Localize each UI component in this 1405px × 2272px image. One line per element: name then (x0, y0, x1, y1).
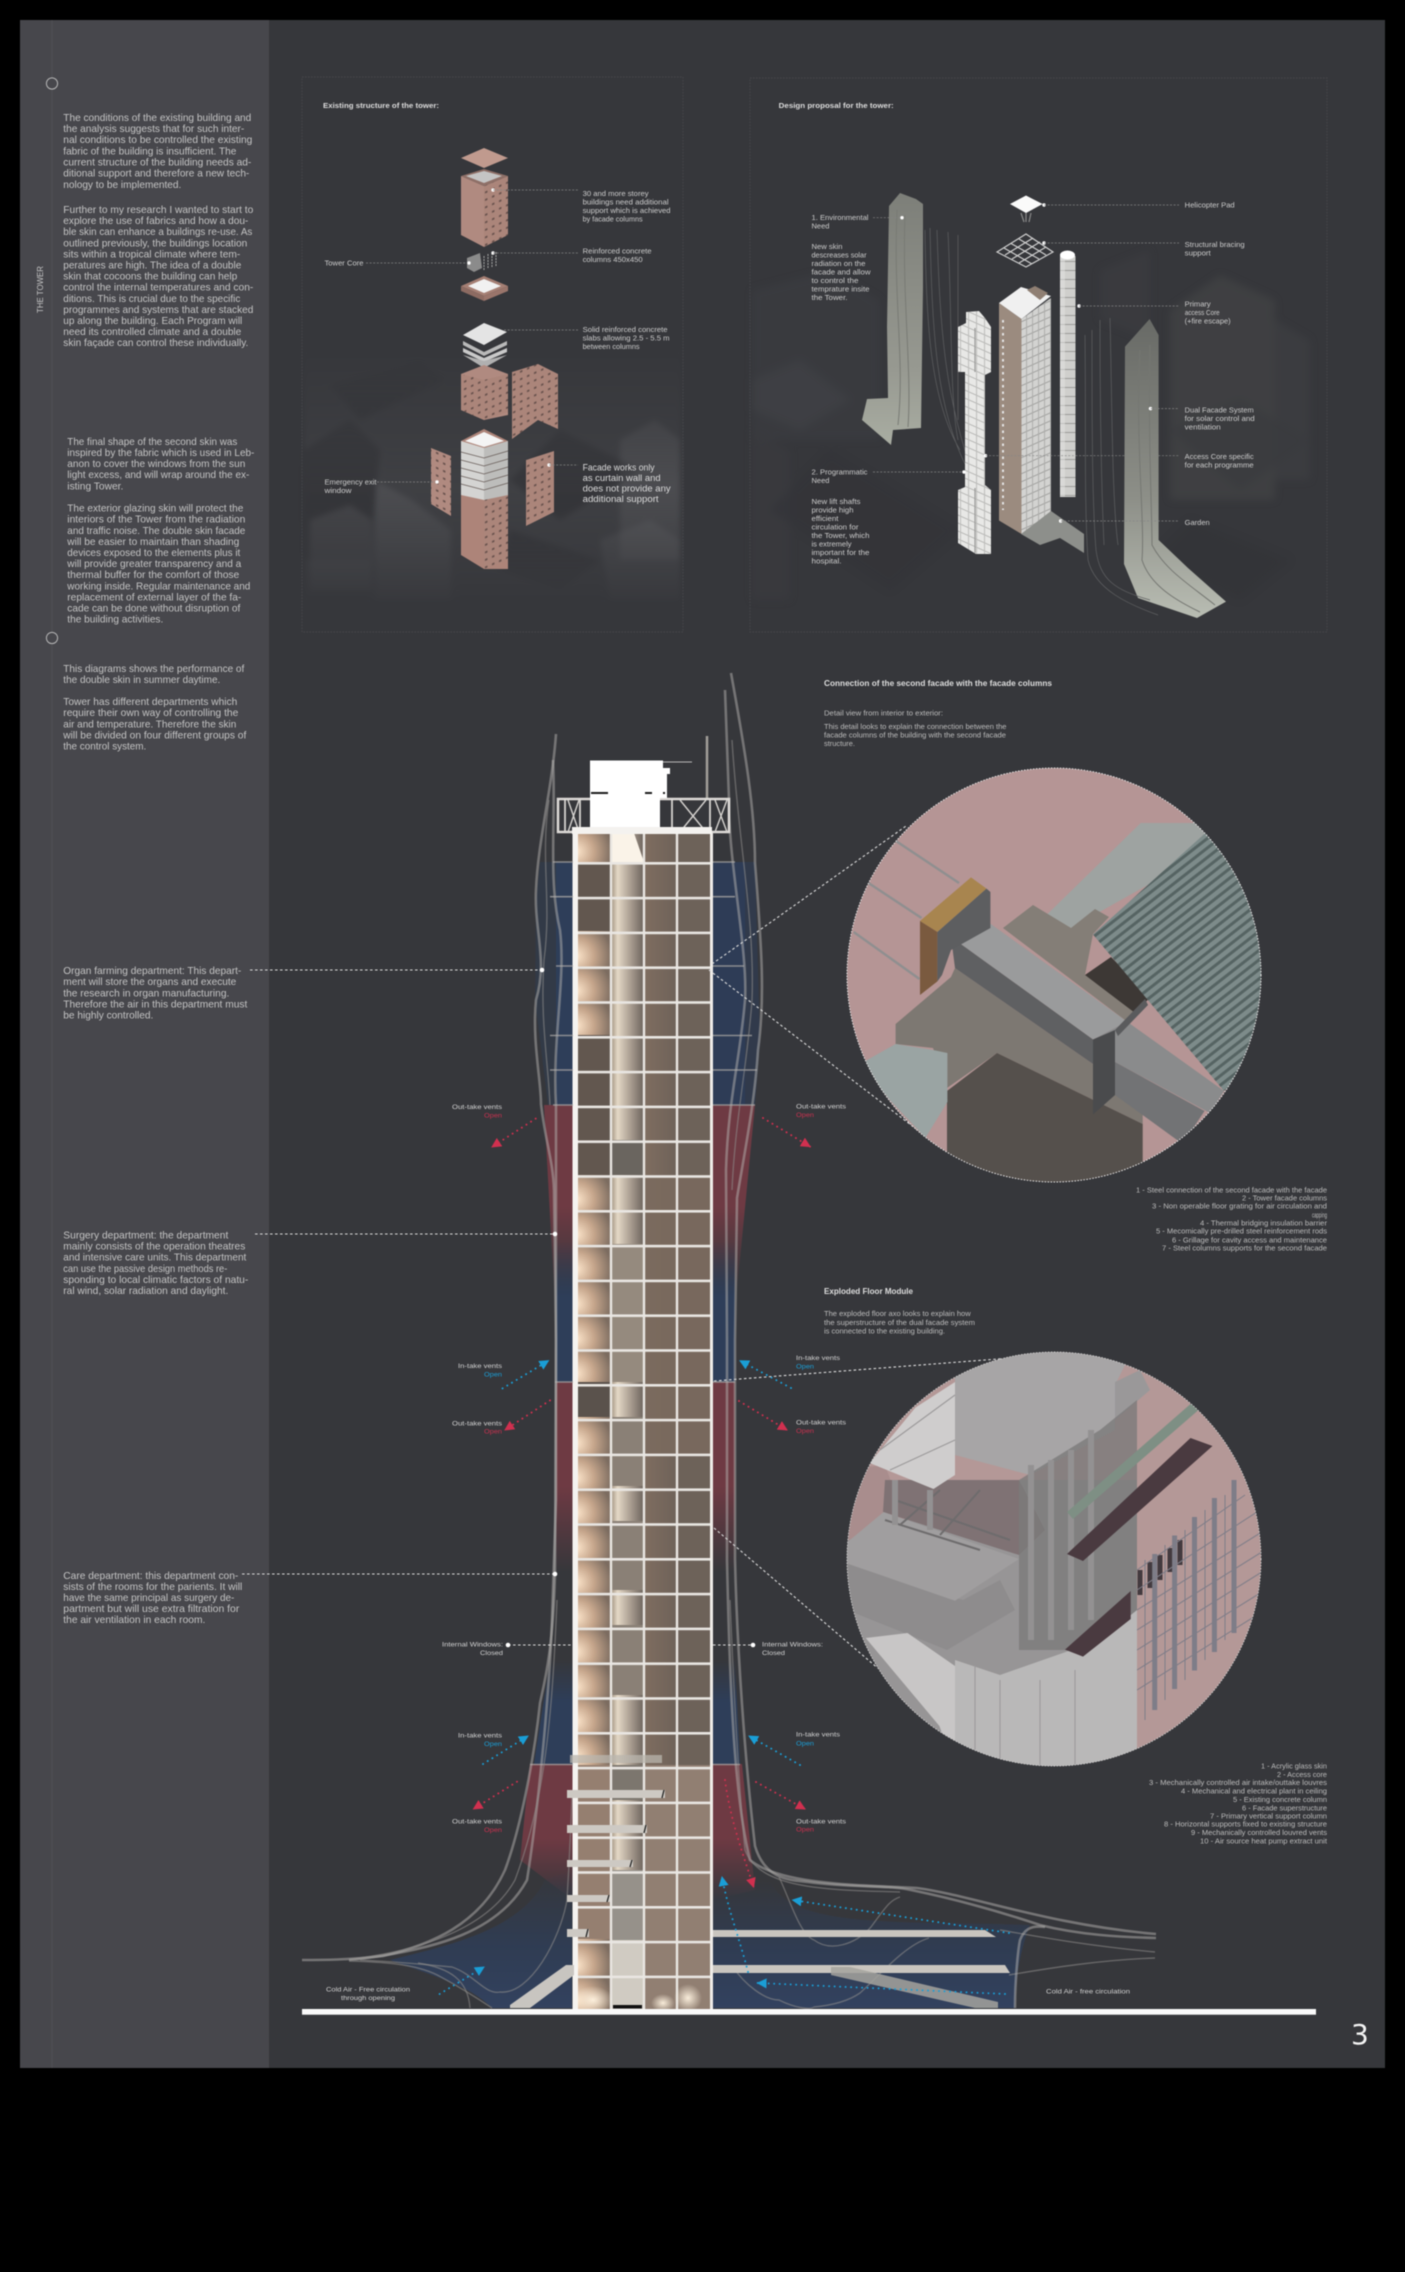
callout: columns (491, 246, 652, 264)
heading: connection detail: This detail looks to explain the connection between the (824, 722, 1006, 731)
legend: floor module: 6 - Facade superstructure (1242, 1803, 1327, 1812)
vent: out-take middle right (739, 1401, 846, 1435)
text block: surgery: sponding to local climatic factors of natu- (63, 1275, 248, 1286)
heading: connection detail (824, 679, 1053, 748)
cavity floor lines (530, 862, 757, 1764)
text block: care: have the same principal as surgery de- (63, 1593, 234, 1604)
heading: exploded floor module: Exploded Floor Module (824, 1287, 914, 1296)
text block: final shape: inspired by the fabric which is used in Leb- (67, 448, 254, 459)
garden (1021, 511, 1084, 553)
text block: research on fabrics: outlined previously, the buildings location (63, 238, 247, 249)
legend: connection detail: 7 - Steel columns supports for the second facade (1162, 1244, 1327, 1253)
concrete top (1003, 905, 1135, 1022)
text block: care: partment but will use extra filtration for (63, 1604, 240, 1615)
internal windows left (442, 1642, 571, 1657)
panel: design proposal (750, 78, 1327, 632)
vent: in-take middle left: In-take vents (458, 1363, 502, 1370)
text block: diagram intro: will be divided on four different groups of (62, 730, 246, 741)
text block: existing building conditions: fabric of the building is insufficient. The (63, 146, 237, 157)
steel beam (962, 924, 1124, 1040)
text block: diagram intro: air and temperature. Therefore the skin (63, 719, 236, 730)
callout: tower core (324, 258, 471, 268)
callout: access core: for each programme (1185, 460, 1254, 469)
text block: exterior glazing: the building activities. (67, 615, 163, 626)
heading: connection detail: facade columns of the building with the second facade (824, 730, 1006, 739)
text block: research on fabrics: control the internal temperatures and con- (63, 283, 253, 294)
text block: research on fabrics: peratures are high. The idea of a double (63, 260, 242, 272)
text block: organ farming (63, 966, 247, 1022)
text block: exterior glazing: will be easier to maintain than shading (66, 537, 240, 548)
callout: programmatic need: Need (812, 476, 830, 485)
grating (1093, 832, 1275, 1091)
dark panels (1067, 1438, 1212, 1561)
callout: slabs (504, 325, 670, 351)
right grille (1137, 1480, 1265, 1720)
second skin lines (302, 673, 1156, 2008)
callout: primary core: access Core (1185, 308, 1220, 317)
text block: diagram intro: the control system. (63, 742, 146, 752)
callout: emergency window: Emergency exit (324, 478, 376, 486)
text block: exterior glazing: thermal buffer for the comfort of those (67, 570, 240, 581)
callout line: surgery (255, 1232, 557, 1236)
callout line: organ farming (250, 968, 544, 972)
vent: out-take middle right: Open (796, 1428, 815, 1435)
vent: out-take upper left (452, 1104, 536, 1147)
legend: floor module: 9 - Mechanically controlled louvred vents (1191, 1828, 1327, 1837)
upper rounded bulk (870, 1382, 955, 1489)
text block: exterior glazing: and traffic noise. The double skin facade (67, 526, 246, 537)
callout: environmental need: descreases solar (812, 250, 867, 259)
internal windows right (713, 1642, 823, 1657)
structural bracing (997, 234, 1053, 267)
heading: exploded floor module: The exploded floor axo looks to explain how (824, 1309, 972, 1318)
text block: research on fabrics: ditions. This is crucial due to the specific (63, 294, 240, 305)
text block: research on fabrics: sits within a tropical climate where tem- (63, 249, 240, 260)
callout: primary core: (+fire escape) (1185, 316, 1231, 325)
city background (304, 345, 681, 610)
heading: exploded floor module: is connected to the existing building. (824, 1326, 945, 1335)
vent: out-take lower right: Out-take vents (796, 1818, 846, 1825)
callout: dual facade: Dual Facade System (1185, 405, 1254, 414)
vent: in-take lower left: Open (484, 1741, 503, 1748)
callout: programmatic need: hospital. (812, 556, 842, 565)
vent: out-take lower left (452, 1782, 517, 1834)
text block: research on fabrics: skin that cocoons the building can help (63, 272, 238, 283)
text block: exterior glazing: replacement of external layer of the fa- (67, 592, 241, 603)
text block: existing building conditions: nology to be implemented. (63, 180, 181, 191)
callout: slabs: between columns (583, 342, 640, 351)
callout lines to connection detail (709, 825, 928, 1138)
callout: programmatic need (812, 467, 966, 565)
circle detail: exploded floor module (840, 1345, 1265, 1770)
lower tower (955, 1610, 1137, 1770)
text block: surgery: and intensive care units. This department (63, 1253, 246, 1264)
text block: research on fabrics: Further to my research I wanted to start to (63, 205, 254, 216)
internal windows left: Internal Windows: (442, 1642, 503, 1649)
right fabric skin (1124, 319, 1226, 618)
vent: out-take upper left: Open (484, 1112, 503, 1119)
upper slab (1047, 823, 1210, 928)
text block: exterior glazing: working inside. Regular maintenance and (66, 581, 251, 592)
callout: emergency window: window (323, 486, 352, 495)
cold air label left (326, 1986, 411, 2002)
vent: out-take middle left (452, 1400, 550, 1435)
vent: in-take middle right: In-take vents (796, 1355, 840, 1362)
wood plate (920, 877, 986, 932)
city background (752, 250, 1310, 600)
panel title: Existing structure of the tower: (323, 101, 439, 110)
callout: curtain wall: as curtain wall and (583, 473, 661, 484)
text block: existing building conditions: current structure of the building needs ad- (63, 158, 251, 168)
vent: out-take middle left: Open (484, 1428, 503, 1435)
circle detail: facade connection (846, 768, 1275, 1190)
callout: programmatic need: is extremely (812, 539, 852, 548)
callout: columns: Reinforced concrete (583, 246, 652, 256)
callout: programmatic need: circulation for (812, 522, 859, 531)
section: double skin tower (242, 673, 1316, 2015)
legend: floor module: 5 - Existing concrete column (1233, 1795, 1327, 1804)
heading: exploded floor module (824, 1287, 975, 1335)
text block: existing building conditions: The conditions of the existing building and (63, 113, 252, 124)
text block: research on fabrics: skin façade can control these individually. (63, 338, 248, 349)
callout: emergency window (323, 478, 439, 495)
callout: storeys: support which is achieved (583, 206, 671, 215)
column (947, 1053, 1143, 1190)
text block: diagram intro: the double skin in summer daytime. (63, 675, 220, 686)
ground line (302, 2009, 1316, 2015)
text block: final shape: The final shape of the second skin was (67, 437, 237, 448)
callout: primary core (1077, 299, 1231, 325)
callout: primary core: Primary (1185, 299, 1211, 308)
text block: exterior glazing (66, 504, 251, 626)
cold air label left: through opening (341, 1995, 396, 2002)
helicopter pad (1010, 196, 1043, 222)
vertical title: THE TOWER (36, 266, 45, 313)
floor plates (847, 1563, 1015, 1650)
callout: environmental need: Need (812, 222, 830, 230)
text block: research on fabrics: ble skin can enhance a buildings re-use. As (63, 227, 252, 238)
callout: environmental need (812, 213, 904, 302)
legend: connection detail: 2 - Tower facade columns (1242, 1194, 1327, 1203)
vent: in-take lower right: Open (796, 1740, 815, 1747)
text block: surgery: can use the passive design methods re- (63, 1264, 227, 1275)
sidebar (20, 20, 269, 2068)
base grey massing (848, 1520, 1068, 1732)
text block: existing building conditions (63, 113, 253, 191)
text block: diagram intro: This diagrams shows the performance of (63, 664, 244, 675)
internal windows left: Closed (480, 1650, 504, 1657)
panel: existing structure (302, 77, 683, 632)
vent: out-take lower left: Out-take vents (452, 1819, 502, 1826)
callout: access core: Access Core specific (1185, 452, 1254, 461)
text block: existing building conditions: nal conditions to be controlled the existing (63, 135, 253, 146)
vent: in-take middle left: Open (484, 1371, 503, 1378)
text block: surgery: ral wind, solar radiation and daylight. (63, 1286, 228, 1297)
callout: programmatic need: efficient (812, 514, 839, 523)
text block: exterior glazing: cade can be done without disruption of (67, 604, 240, 614)
vent: in-take lower left: In-take vents (458, 1732, 502, 1739)
legend: connection detail: 5 - Mecomically pre-drilled steel reinforcement rods (1156, 1227, 1327, 1236)
callout: environmental need: facade and allow (812, 267, 871, 276)
text block: final shape: anon to cover the windows from the sun (67, 459, 245, 470)
left entry ramp (510, 1965, 574, 2008)
callout: garden (1059, 518, 1210, 527)
text block: care: Care department: this department con- (63, 1571, 238, 1582)
sidebar marker circle 1 (46, 78, 58, 89)
text block: diagram intro: require their own way of controlling the (63, 708, 239, 719)
text block: research on fabrics (63, 205, 254, 349)
cold air label right: Cold Air - free circulation (1046, 1988, 1131, 1995)
air louvre strip (1067, 1400, 1198, 1519)
vent: out-take upper right: Open (796, 1112, 815, 1119)
callout: columns: columns 450x450 (583, 255, 643, 264)
text block: existing building conditions: the analysis suggests that for such inter- (63, 124, 244, 135)
panel title: Design proposal for the tower: (779, 101, 894, 110)
text block: surgery (63, 1230, 248, 1297)
text block: care (63, 1571, 242, 1626)
tower rooms (572, 832, 713, 2014)
callout: environmental need: New skin (812, 242, 842, 251)
legend: floor module: 1 - Acrylic glass skin (1261, 1762, 1327, 1771)
callout: curtain wall (547, 462, 671, 505)
callout: tower core: Tower Core (324, 258, 364, 268)
vent: out-take middle right: Out-take vents (796, 1420, 846, 1427)
text block: research on fabrics: up along the building. Each Program will (63, 316, 242, 327)
text block: organ farming: Therefore the air in this department must (63, 999, 247, 1010)
heading: exploded floor module: the superstructure of the dual facade system (824, 1318, 975, 1327)
callout: dual facade: for solar control and (1185, 414, 1255, 423)
glass wall (860, 1044, 947, 1138)
text block: existing building conditions: ditional support and therefore a new tech- (63, 169, 249, 180)
vent: out-take middle left: Out-take vents (452, 1420, 502, 1427)
text block: diagram intro (62, 664, 246, 752)
upper tower mass (955, 1352, 1124, 1474)
legend: connection detail: capping (1312, 1210, 1327, 1219)
text block: exterior glazing: interiors of the Tower from the radiation (67, 515, 245, 526)
text block: final shape (67, 437, 254, 492)
text block: research on fabrics: need its controlled climate and a double (63, 327, 242, 338)
legend: floor module: 4 - Mechanical and electrical plant in ceiling (1181, 1786, 1327, 1795)
vent: out-take upper right (763, 1104, 846, 1147)
vent: in-take lower right (749, 1731, 840, 1765)
heading: connection detail: structure. (824, 739, 855, 748)
callout: curtain wall: does not provide any (583, 484, 671, 494)
text block: organ farming: be highly controlled. (63, 1011, 153, 1022)
callout: environmental need: the Tower. (812, 293, 848, 302)
callout: storeys: buildings need additional (583, 198, 669, 206)
heading: connection detail: Connection of the second facade with the facade columns (824, 679, 1053, 688)
callout: access core (984, 452, 1254, 469)
callout: environmental need: temprature insite (812, 284, 870, 293)
vent: in-take middle left (458, 1361, 548, 1388)
callout: dual facade: ventilation (1185, 422, 1221, 431)
text block: organ farming: ment will store the organs and execute (63, 977, 237, 988)
page number: 3 (1351, 2018, 1369, 2051)
text block: organ farming: the research in organ manufacturing. (63, 988, 229, 999)
callout: storeys (491, 188, 671, 224)
callout lines to floor module (714, 1359, 1003, 1668)
legend: floor module (1149, 1762, 1327, 1846)
callout: dual facade (1149, 405, 1255, 431)
airflow arrows base (440, 1780, 1009, 1994)
callout: structural bracing (1042, 240, 1245, 257)
legend: floor module: 2 - Access core (1277, 1770, 1327, 1779)
callout: structural bracing: support (1185, 248, 1211, 257)
legend: connection detail (1136, 1185, 1328, 1253)
exploded tower axonometric (431, 148, 558, 569)
lower concrete slab (896, 968, 1143, 1124)
vent: in-take lower left (458, 1732, 528, 1764)
flow lines left (925, 228, 975, 480)
sidebar marker circle 2 (46, 632, 58, 644)
callout: storeys: by facade columns (583, 214, 643, 224)
text block: exterior glazing: The exterior glazing skin will protect the (67, 504, 244, 515)
text block: final shape: light excess, and will wrap around the ex- (67, 470, 249, 481)
text block: exterior glazing: will provide greater transparency and a (66, 559, 242, 570)
vent: out-take lower left: Open (484, 1827, 503, 1834)
callout: helicopter pad (1042, 201, 1235, 210)
callout: environmental need: radiation on the (812, 259, 866, 268)
legend: connection detail: 3 - Non operable floor grating for air circulation and (1152, 1202, 1327, 1211)
lift core tower (958, 311, 991, 554)
internal windows right: Internal Windows: (762, 1642, 823, 1649)
callout: curtain wall: additional support (583, 494, 659, 505)
callout: programmatic need: the Tower, which (812, 531, 870, 540)
callout: environmental need: 1. Environmental (812, 213, 869, 222)
projecting floor slabs (567, 1755, 665, 1937)
callout: curtain wall: Facade works only (583, 462, 655, 474)
text block: exterior glazing: devices exposed to the elements plus it (67, 548, 240, 559)
left fabric skin (862, 193, 923, 445)
facade structure (1019, 1400, 1137, 1650)
legend: floor module: 3 - Mechanically controlled air intake/outtake louvres (1149, 1778, 1327, 1787)
callout: programmatic need: important for the (812, 548, 870, 557)
roof truss and plant room (558, 760, 729, 834)
dark louvre blades (1140, 1540, 1180, 1595)
legend: connection detail: 4 - Thermal bridging insulation barrier (1200, 1219, 1328, 1228)
cold air label left: Cold Air - Free circulation (326, 1986, 411, 1993)
text block: surgery: mainly consists of the operation theatres (63, 1241, 245, 1252)
legend: floor module: 10 - Air source heat pump extract unit (1200, 1837, 1327, 1846)
cavity colour zones (390, 862, 1030, 2008)
legend: connection detail: 1 - Steel connection of the second facade with the facade (1136, 1185, 1327, 1194)
lower bulk (866, 1632, 956, 1740)
text block: final shape: isting Tower. (67, 481, 123, 492)
vent: in-take lower right: In-take vents (796, 1731, 840, 1738)
text block: diagram intro: Tower has different departments which (63, 697, 237, 708)
callout: programmatic need: 2. Programmatic (812, 467, 868, 476)
callout: structural bracing: Structural bracing (1185, 240, 1245, 249)
callout: storeys: 30 and more storey (583, 189, 649, 198)
vent: in-take middle right: Open (796, 1363, 815, 1370)
callout: slabs: slabs allowing 2.5 - 5.5 m (583, 334, 670, 342)
flow lines right (1085, 318, 1158, 615)
callout: garden: Garden (1185, 518, 1210, 527)
text block: research on fabrics: programmes and systems that are stacked (63, 305, 254, 316)
pink floor strip (848, 1466, 890, 1540)
right suspended platforms (713, 1930, 1010, 2008)
primary access core (1060, 250, 1076, 497)
vent: out-take lower right: Open (796, 1826, 815, 1833)
callout: slabs: Solid reinforced concrete (583, 325, 668, 334)
legend: floor module: 7 - Primary vertical support column (1210, 1811, 1327, 1820)
callout: environmental need: to control the (812, 276, 858, 285)
callout: helicopter pad: Helicopter Pad (1185, 201, 1235, 210)
vent: out-take upper left: Out-take vents (452, 1104, 502, 1111)
rods (854, 841, 959, 979)
text block: care: sists of the rooms for the parients. It will (63, 1582, 242, 1593)
text block: organ farming: Organ farming department: This depart- (63, 966, 241, 977)
columns (895, 1430, 1091, 1640)
vent: out-take upper right: Out-take vents (796, 1104, 846, 1111)
callout: programmatic need: provide high (812, 505, 854, 514)
vent: in-take middle right (740, 1355, 840, 1388)
text block: research on fabrics: explore the use of fabrics and how a dou- (63, 216, 248, 227)
main tower (999, 286, 1051, 534)
text block: care: the air ventilation in each room. (63, 1615, 205, 1626)
internal windows right: Closed (762, 1650, 786, 1657)
callout line: care (242, 1572, 557, 1576)
text block: surgery: Surgery department: the department (63, 1230, 228, 1241)
callout: programmatic need: New lift shafts (812, 497, 861, 506)
vent: out-take lower right (756, 1782, 846, 1833)
heading: connection detail: Detail view from interior to exterior: (824, 708, 943, 717)
legend: floor module: 8 - Horizontal supports fixed to existing structure (1164, 1819, 1327, 1828)
legend: connection detail: 6 - Grillage for cavity access and maintenance (1172, 1235, 1327, 1244)
